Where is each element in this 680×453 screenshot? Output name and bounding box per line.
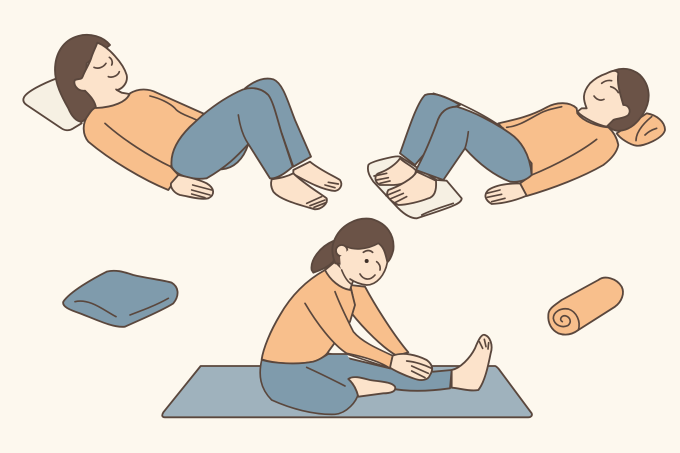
- toes: [374, 173, 407, 203]
- extended foot: [452, 335, 492, 390]
- near arm: [305, 292, 393, 368]
- near foot: [387, 172, 436, 205]
- ear: [336, 245, 347, 256]
- figure: woman lying on roll with feet on folded towel: [368, 69, 665, 218]
- hips fill: [260, 354, 358, 414]
- hips outline: [260, 354, 390, 414]
- sweater: [84, 89, 207, 190]
- eye: [365, 259, 369, 263]
- icon: neck roll: [617, 113, 665, 146]
- hand: [485, 183, 527, 204]
- fingers: [487, 190, 505, 202]
- torso: [262, 270, 355, 363]
- near foot: [271, 173, 327, 209]
- icon: folded towel: [368, 156, 462, 218]
- face: [74, 43, 129, 108]
- far arm: [350, 285, 408, 356]
- facial features: [94, 57, 122, 93]
- icon: rolled orange towel: [548, 278, 623, 335]
- icon: head pillow: [23, 78, 82, 130]
- facial features: [594, 80, 618, 100]
- near leg: [171, 88, 293, 179]
- hidden calf: [210, 133, 248, 169]
- face outline: [347, 243, 387, 285]
- towel line: [422, 203, 453, 215]
- near leg: [416, 107, 532, 182]
- leg crease: [238, 115, 248, 144]
- near arm lines: [305, 292, 393, 368]
- straight leg: [317, 353, 452, 393]
- far leg: [400, 94, 460, 165]
- hand: [390, 354, 432, 380]
- toes: [307, 182, 338, 207]
- facial features: [342, 251, 380, 284]
- ponytail: [311, 241, 335, 273]
- far leg: [245, 79, 311, 167]
- hair: [607, 69, 649, 131]
- figure: woman sitting on mat stretching toward foot: [162, 219, 532, 417]
- icon: yoga mat: [162, 366, 532, 417]
- tucked foot: [348, 377, 395, 397]
- ear-side skin: [340, 250, 350, 278]
- leg lines: [433, 93, 503, 148]
- hair back: [55, 35, 110, 122]
- figure: woman lying on pillow with knees bent: [23, 35, 341, 209]
- face: [577, 71, 630, 127]
- far foot: [293, 162, 341, 191]
- sweater: [498, 103, 618, 196]
- neck: [325, 262, 353, 290]
- icon: blue cushion: [63, 271, 178, 327]
- face: [340, 243, 387, 285]
- roll lines: [636, 117, 657, 141]
- fingers: [192, 185, 212, 198]
- far foot: [375, 158, 416, 185]
- fingers: [407, 361, 432, 378]
- toes: [479, 339, 489, 349]
- hair: [332, 219, 394, 265]
- thigh crease: [307, 367, 345, 386]
- hand: [171, 175, 213, 199]
- sweater folds: [507, 107, 597, 175]
- sweater folds: [105, 96, 197, 167]
